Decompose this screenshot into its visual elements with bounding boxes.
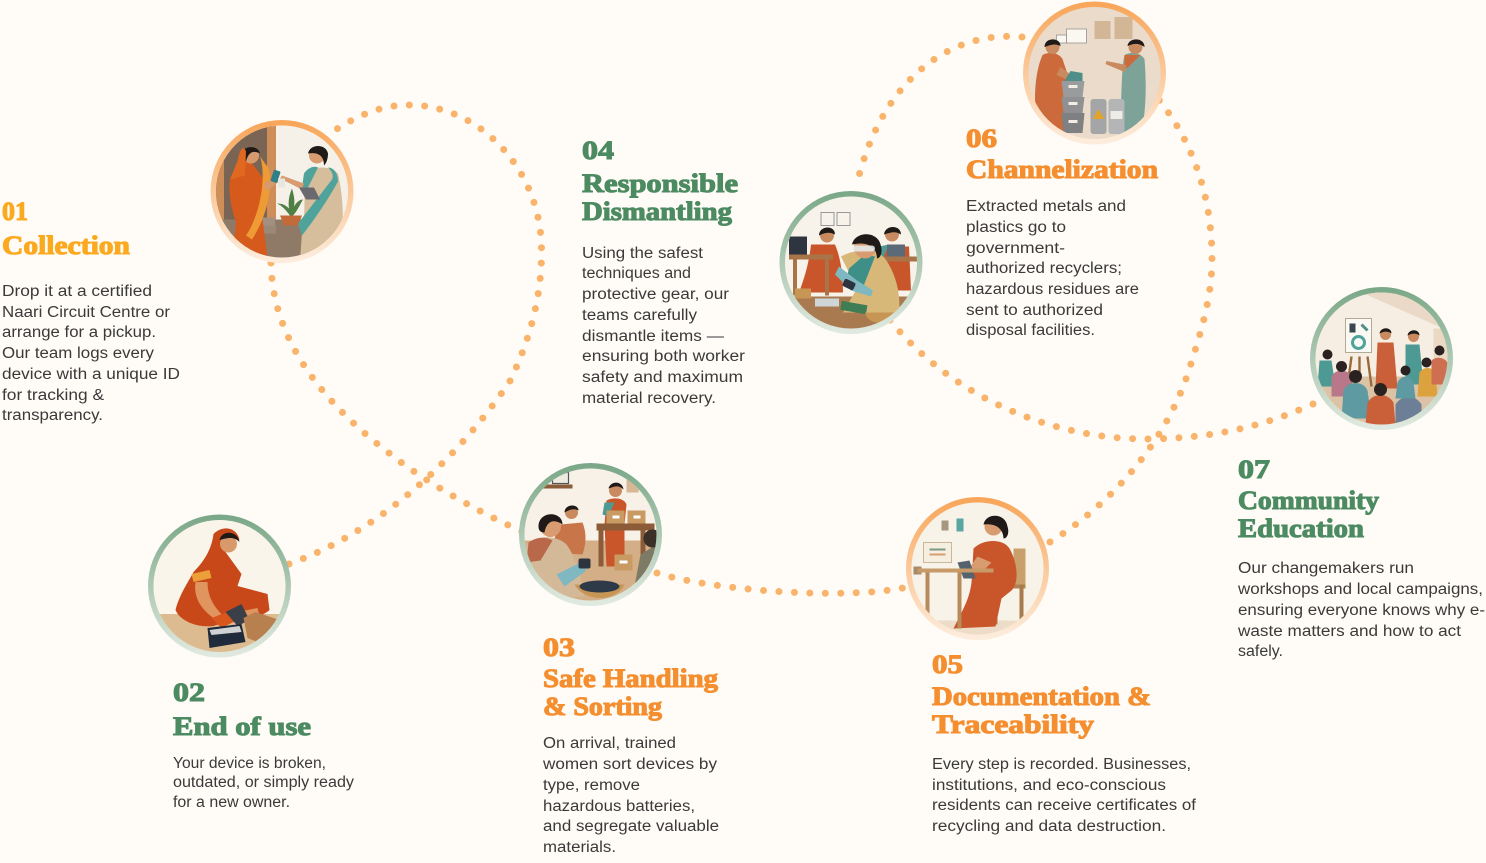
text block: recycling and data destruction. (932, 818, 1166, 835)
text block: teams carefully (582, 307, 697, 324)
text block: waste matters and how to act (1237, 623, 1462, 640)
text block: sent to authorized (966, 302, 1103, 319)
text block: material recovery. (582, 390, 716, 407)
text block: for a new owner. (173, 794, 290, 811)
text block: On arrival, trained (543, 735, 676, 752)
text block: institutions, and eco-conscious (932, 777, 1166, 794)
heading: & Sorting (543, 692, 662, 721)
panel: step 02 end of use (151, 517, 354, 811)
text block: safety and maximum (582, 369, 743, 386)
text block (542, 735, 719, 856)
text block: ensuring both worker (582, 348, 745, 365)
panel: step 01 collection (2, 123, 351, 424)
heading: Traceability (932, 710, 1094, 739)
heading (582, 169, 738, 226)
text block: dismantle items — (582, 328, 725, 345)
text block: hazardous residues are (966, 281, 1139, 298)
text block: residents can receive certificates of (932, 797, 1197, 814)
text block: outdated, or simply ready (173, 774, 354, 791)
panel: step 05 documentation (909, 500, 1197, 835)
heading (932, 682, 1151, 739)
heading: Documentation & (932, 682, 1151, 711)
heading (1238, 486, 1379, 543)
icon: community education illustration (1313, 290, 1450, 427)
number: 01 (2, 197, 28, 226)
text block: safely. (1238, 643, 1283, 660)
heading: Community (1238, 486, 1379, 515)
text block (966, 198, 1139, 339)
text block: transparency. (2, 407, 103, 424)
heading: Education (1238, 514, 1365, 543)
text block: plastics go to (966, 219, 1066, 236)
text block: Our team logs every (2, 345, 154, 362)
text block: for tracking & (2, 387, 105, 404)
number: 04 (582, 136, 614, 165)
heading: Responsible (582, 169, 738, 198)
text block: authorized recyclers; (966, 260, 1122, 277)
heading: End of use (173, 712, 311, 741)
icon: sorting illustration (522, 466, 662, 603)
text block: government- (966, 240, 1065, 257)
number: 02 (173, 678, 205, 707)
heading: Collection (2, 231, 131, 260)
heading: Safe Handling (543, 664, 718, 693)
text block: techniques and (582, 265, 691, 282)
icon: channelization illustration (1026, 4, 1163, 142)
text block: and segregate valuable (543, 818, 719, 835)
text block: protective gear, our (582, 286, 729, 303)
text block: Extracted metals and (966, 198, 1126, 215)
number: 07 (1238, 455, 1270, 484)
icon: dismantling illustration (782, 194, 920, 331)
text block: ensuring everyone knows why e- (1238, 602, 1485, 619)
number: 06 (966, 124, 997, 153)
text block: arrange for a pickup. (2, 324, 156, 341)
text block (1237, 560, 1485, 660)
icon: end of use illustration (151, 517, 288, 655)
panel: step 06 channelization (966, 4, 1163, 339)
heading (543, 664, 718, 721)
icon: collection illustration (213, 123, 351, 262)
text block: women sort devices by (542, 756, 717, 773)
icon: documentation illustration (909, 500, 1046, 637)
text block: type, remove (543, 777, 640, 794)
number: 05 (932, 650, 963, 679)
text block: Using the safest (582, 245, 704, 262)
text block: device with a unique ID (2, 366, 180, 383)
text block: workshops and local campaigns, (1237, 581, 1483, 598)
text block: Every step is recorded. Businesses, (932, 756, 1191, 773)
text block: Naari Circuit Centre or (2, 304, 170, 321)
dotted journey paths (271, 36, 1313, 593)
text block: disposal facilities. (966, 322, 1095, 339)
text block: Your device is broken, (173, 755, 326, 772)
panel: step 07 community education (1237, 290, 1485, 660)
heading: Channelization (966, 155, 1159, 184)
text block (582, 245, 745, 407)
heading: Dismantling (582, 197, 732, 226)
number: 03 (543, 633, 575, 662)
text block (2, 283, 180, 424)
text block (173, 755, 354, 811)
text block: materials. (543, 839, 616, 856)
text block (932, 756, 1197, 835)
panel: step 04 responsible dismantling (582, 136, 920, 407)
text block: hazardous batteries, (543, 798, 695, 815)
panel: step 03 safe handling (522, 466, 719, 856)
text block: Our changemakers run (1238, 560, 1414, 577)
text block: Drop it at a certified (2, 283, 152, 300)
